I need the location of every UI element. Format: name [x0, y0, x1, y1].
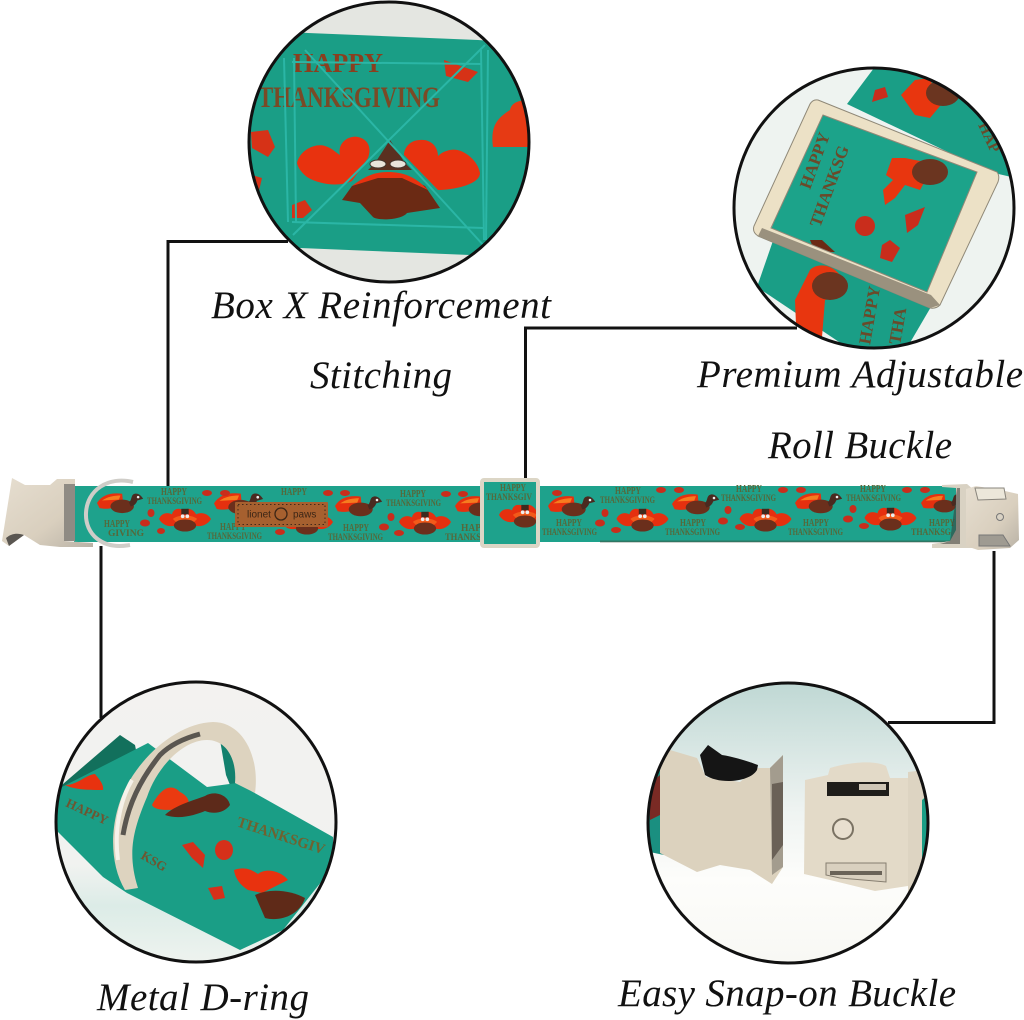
printed text on strap: THANKSG	[911, 527, 951, 537]
printed text on strap: HAPPY	[615, 486, 642, 497]
callout: snap-on buckle close-up	[640, 683, 928, 963]
fabric strap	[56, 743, 333, 950]
turkey wings	[297, 137, 370, 184]
caption: roll buckle: Roll Buckle	[767, 424, 952, 467]
male buckle part	[804, 762, 928, 892]
right buckle	[932, 484, 1019, 550]
printed text on strap: THANKSGIVING	[386, 498, 441, 508]
printed text on strap: HAPPY	[281, 487, 308, 498]
leather brand patch: lionet	[247, 510, 271, 520]
printed text on strap: THANKS	[445, 532, 481, 542]
leather brand patch	[235, 502, 328, 527]
collar	[2, 478, 1019, 550]
connector: roll buckle	[526, 328, 797, 480]
printed text on strap: HAP	[461, 523, 481, 534]
printed text on strap: THANKSGIVING	[665, 527, 720, 537]
printed text on strap: HAPPY	[736, 484, 763, 495]
printed text on strap: HAPPY	[161, 487, 188, 498]
connector: snap buckle	[888, 551, 994, 722]
printed text on strap: HAPPY	[929, 518, 956, 529]
printed text on strap: HAPPY	[400, 489, 427, 500]
ring-side fabric behind	[220, 744, 252, 792]
leather brand patch: paws	[293, 510, 316, 520]
caption: easy snap-on buckle: Easy Snap-on Buckle	[617, 972, 956, 1015]
fabric print: THANKSGIV	[235, 815, 327, 858]
box X stitching	[284, 45, 488, 247]
connector: box stitching	[168, 242, 288, 486]
caption: premium adjustable: Premium Adjustable	[696, 353, 1023, 396]
connector: D-ring	[100, 546, 102, 718]
printed text on strap: THANKSGIVING	[147, 496, 202, 506]
female buckle part	[660, 745, 783, 884]
fabric print: HAPPY	[64, 795, 111, 828]
adjustable keeper	[482, 480, 551, 546]
callout: roll buckle close-up	[734, 68, 1024, 353]
printed text on strap: THANKSGIVING	[328, 532, 383, 542]
metal roll buckle frame	[754, 100, 999, 308]
print on straps: THA	[885, 305, 910, 346]
printed text on strap: HAPPY	[556, 518, 583, 529]
caption: metal D-ring: Metal D-ring	[96, 976, 309, 1019]
printed text on strap: GIVING	[108, 528, 144, 538]
fabric print	[64, 774, 327, 919]
leaf pattern	[140, 487, 930, 536]
caption: stitching: Stitching	[310, 354, 452, 397]
roll print: HAPPY	[796, 130, 834, 191]
fabric print: KSG	[138, 848, 170, 874]
turkey body and head	[342, 140, 440, 219]
lower strap	[758, 242, 930, 346]
turkey pattern	[97, 493, 964, 535]
printed text on strap: HAPPY	[680, 518, 707, 529]
caption: box X reinforcement: Box X Reinforcement	[211, 284, 552, 327]
printed greeting: HAPPY	[293, 48, 383, 78]
callout: box X stitching close-up	[240, 2, 540, 282]
left buckle	[2, 478, 93, 547]
printed text on strap: THANKSGIVING	[788, 527, 843, 537]
printed text on strap: THANKSGIVING	[846, 493, 901, 503]
printed text on strap: HAPPY	[220, 522, 247, 533]
fabric edge	[650, 770, 664, 855]
printed text on strap: HAPPY	[860, 484, 887, 495]
roll print: THANKSG	[806, 143, 853, 229]
print on straps	[795, 78, 1002, 346]
callout: metal D-ring close-up	[56, 682, 336, 962]
printed text on strap: THANKSGIVING	[600, 495, 655, 505]
roll print	[796, 130, 948, 262]
D-ring metal	[113, 722, 256, 890]
fabric band	[250, 32, 528, 255]
upper strap	[847, 70, 1009, 176]
printed text on strap: THANKSGIVING	[721, 493, 776, 503]
printed text on strap: THANKSGIVING	[207, 531, 262, 541]
collar strap	[74, 486, 959, 542]
D-ring	[86, 481, 133, 546]
printed text on strap: HAPPY	[803, 518, 830, 529]
printed text on strap: HAPPY	[343, 523, 370, 534]
print on straps: HAP	[974, 120, 1002, 155]
neighbouring print	[250, 60, 530, 218]
strap bottom edge print	[600, 540, 955, 542]
printed text on strap: THANKSGIVING	[542, 527, 597, 537]
printed greeting: THANKSGIVING	[258, 81, 440, 114]
printed text on strap: HAPPY	[104, 519, 131, 530]
adjustable keeper: HAPPY	[500, 483, 527, 494]
dark rear strap	[62, 735, 136, 787]
print on straps: HAPPY	[855, 285, 884, 346]
printed greeting	[261, 54, 440, 108]
roll section through buckle	[770, 112, 982, 296]
adjustable keeper: THANKSGIV	[486, 492, 532, 502]
printed text on strap	[104, 484, 956, 542]
